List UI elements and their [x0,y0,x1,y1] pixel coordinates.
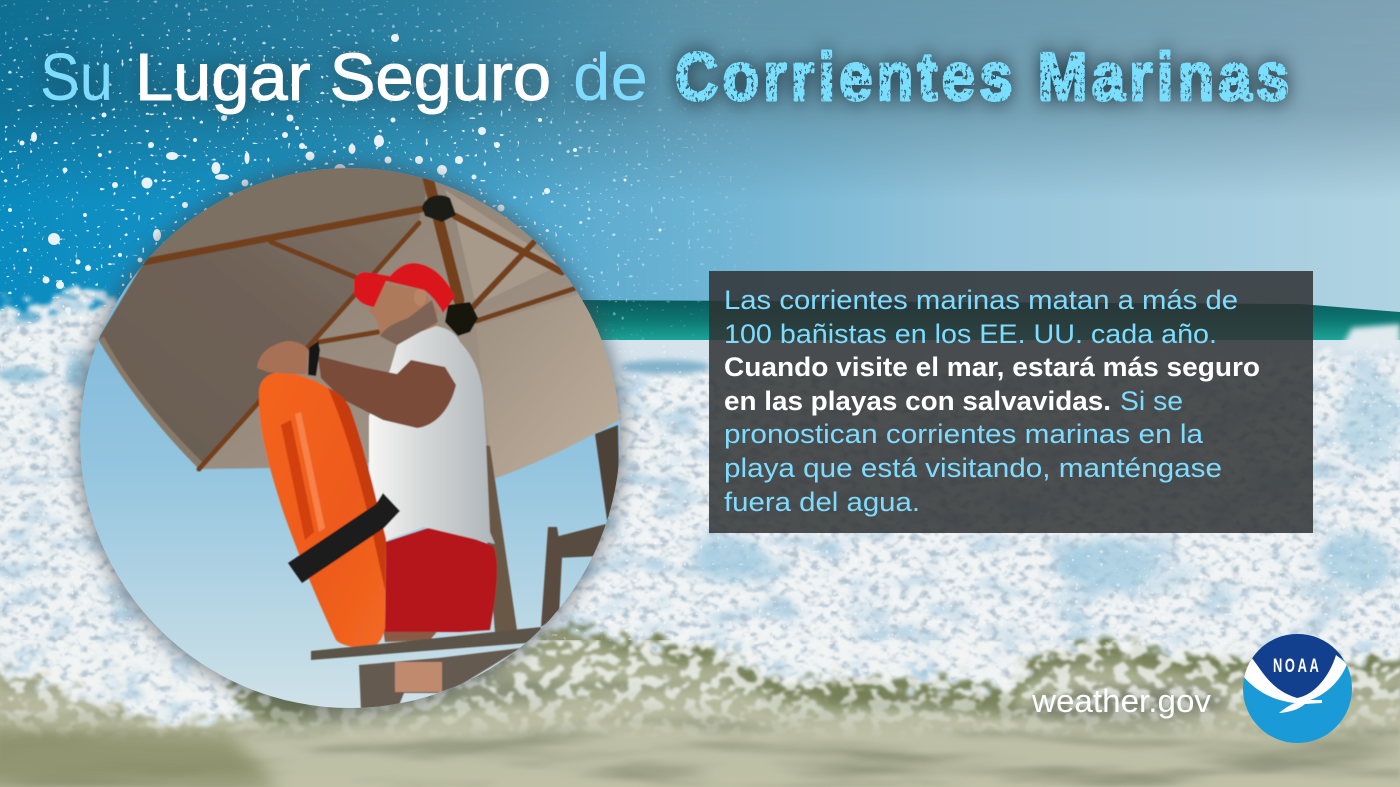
photo circle: lifeguard under umbrella [70,150,640,720]
neck and head [369,283,438,338]
umbrella hubs [422,195,456,222]
body text: fuera del agua. [724,487,920,517]
shorts [385,525,497,632]
website label: weather.gov [1031,683,1211,719]
logo navy sky [1252,634,1344,698]
foam sparkle [0,345,1400,645]
flat foam line below sea [580,340,1400,390]
logo white seagull [1241,655,1347,713]
olive ridge under foam [0,610,1400,720]
circle soft shadow [76,164,624,712]
foam: left wave [0,290,240,725]
body text: 100 bañistas en los EE. UU. cada año. [724,319,1217,349]
near water [0,620,1400,787]
distant sea band [570,300,1400,345]
body text: playa que está visitando, manténgase [724,453,1222,483]
title: de: de [573,40,648,115]
life buoy [259,372,386,648]
legs skin [383,628,440,642]
t-shirt [369,325,495,544]
hand [257,341,308,374]
spray droplets [0,0,760,340]
body text [724,285,1260,517]
title: Su: Su [40,40,113,115]
umbrella canvas [98,150,640,479]
body text: Cuando visite el mar, estará más seguro [724,352,1260,382]
text panel [709,271,1313,533]
title: Lugar Seguro: Lugar Seguro [135,40,551,115]
circle sky [70,160,630,720]
arm [318,356,456,428]
title [40,38,1289,115]
logo wordmark: NOAA [1273,654,1321,677]
body text: pronostican corrientes marinas en la [724,419,1203,449]
sky [0,0,1400,345]
platform [359,648,521,710]
ear [414,288,426,306]
title: Corrientes Marinas: Corrientes Marinas [675,38,1289,115]
body text: Si se [1120,386,1183,416]
foam: right wave [520,355,1400,690]
umbrella ribs [144,178,576,469]
NOAA logo [1243,634,1352,743]
right post and branches [595,425,620,520]
foam: broken lower blobs [0,640,1400,740]
red cap [354,263,455,313]
foam: blue shadows [0,312,1400,591]
buoy strap [288,493,400,583]
watch [308,341,320,376]
umbrella pole [486,445,518,632]
body text: Las corrientes marinas matan a más de [724,285,1238,315]
body text: en las playas con salvavidas. [724,386,1111,416]
